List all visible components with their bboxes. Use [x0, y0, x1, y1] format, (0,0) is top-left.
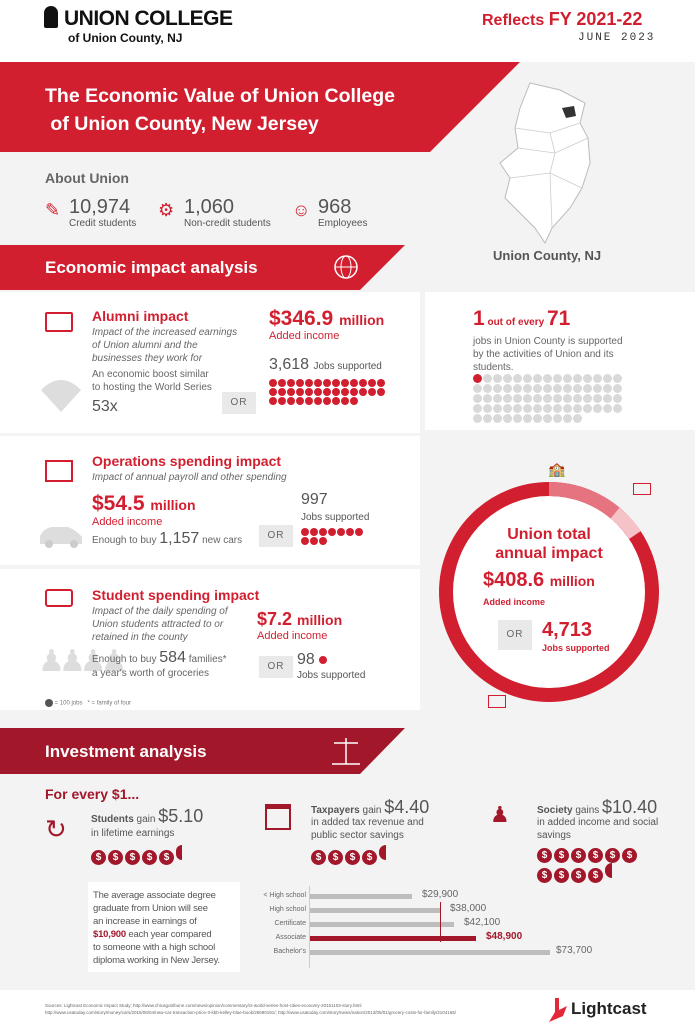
total impact ring: OR: [506, 629, 524, 640]
total impact ring: annual impact: [495, 545, 603, 562]
bar chart: $29,900: [422, 889, 458, 900]
stat credit: [45, 196, 136, 229]
stat noncredit: [158, 196, 271, 229]
students: $: [130, 852, 135, 863]
panel student: OR: [268, 661, 284, 672]
society: $: [593, 850, 598, 861]
panel student: Enough to buy 584 families*: [92, 649, 227, 666]
footer: http://www.usatoday.com/story/money/cars/2015/05/04/new-car-transaction-price-3-kbb-kelley-blue-book/26690191/; http://www.usatoday.com/story/news/nation/2013/05/01/grocery-costs-for-family/2104165/: [45, 1010, 456, 1015]
society: $: [559, 870, 564, 881]
stat credit: Credit students: [69, 218, 136, 229]
panel student: Added income: [257, 630, 327, 642]
panel operations: OR: [268, 530, 284, 541]
panel student: $7.2 million: [257, 609, 342, 629]
total impact ring: Jobs supported: [542, 643, 610, 653]
map: [493, 82, 601, 263]
investment banner: Investment analysis: [45, 742, 207, 761]
stat employees: [292, 196, 368, 229]
econ banner: [0, 245, 405, 290]
panel 1 of 71: [425, 292, 695, 430]
society: $: [542, 850, 547, 861]
associate callout: The average associate degree: [93, 890, 216, 901]
students: $: [113, 852, 118, 863]
panel student: [0, 569, 420, 710]
panel student: ♟♟♟♟: [38, 645, 122, 678]
header: [0, 0, 695, 62]
logo: UNION COLLEGE: [64, 7, 233, 30]
panel student: Jobs supported: [297, 670, 365, 681]
students: [45, 806, 203, 865]
investment content: [0, 774, 695, 990]
title banner: [0, 62, 520, 152]
society: $: [627, 850, 632, 861]
stat noncredit: Non-credit students: [184, 218, 271, 229]
students: $: [164, 852, 169, 863]
bar chart: $42,100: [464, 917, 500, 928]
society: Society gains $10.40: [537, 797, 657, 817]
bar chart: < High school: [263, 892, 306, 899]
society: savings: [537, 830, 571, 841]
society: $: [610, 850, 615, 861]
lightcast logo: Lightcast: [571, 999, 647, 1018]
stat credit: ✎: [45, 200, 60, 220]
panel operations: $54.5 million: [92, 492, 196, 515]
society: $: [576, 870, 581, 881]
map label: Union County, NJ: [493, 248, 601, 263]
society: ♟: [490, 802, 510, 827]
stat employees: 968: [318, 196, 351, 218]
taxpayers: $: [333, 852, 338, 863]
society: [490, 797, 658, 883]
about union: About Union: [45, 170, 129, 186]
stat employees: Employees: [318, 218, 367, 229]
society: $: [576, 850, 581, 861]
associate callout: diploma working in New Jersey.: [93, 955, 220, 966]
panel student: Impact of the daily spending of Union students attracted to or retained in the county: [92, 606, 228, 643]
taxpayers: public sector savings: [311, 830, 404, 841]
students: $: [147, 852, 152, 863]
panel alumni: to hosting the World Series: [92, 382, 212, 393]
students: $: [96, 852, 101, 863]
panel alumni: $346.9 million: [269, 307, 384, 330]
date: Reflects FY 2021-22: [482, 9, 642, 29]
associate callout: $10,900 each year compared: [93, 929, 211, 940]
associate callout: to someone with a high school: [93, 942, 215, 953]
bar chart: $48,900: [486, 931, 522, 942]
panel operations: [0, 436, 420, 565]
students: in lifetime earnings: [91, 828, 174, 839]
lightcast logo: [549, 998, 647, 1022]
panel operations: Added income: [92, 516, 162, 528]
panel alumni: Added income: [269, 330, 339, 342]
logo: of Union County, NJ: [68, 31, 182, 45]
title banner: The Economic Value of Union College: [45, 85, 395, 107]
panel 1 of 71: 1 out of every 71: [473, 307, 570, 330]
taxpayers: $: [350, 852, 355, 863]
panel 1 of 71: jobs in Union County is supported by the activities of Union and its students.: [473, 336, 623, 373]
about union: [45, 170, 368, 229]
bar chart: $38,000: [450, 903, 486, 914]
panel alumni: OR: [230, 397, 248, 408]
associate callout: an increase in earnings of: [93, 916, 197, 927]
stat noncredit: ⚙: [158, 200, 174, 220]
total impact ring: [439, 461, 659, 708]
logo: [44, 6, 233, 45]
total impact ring: $408.6 million: [483, 569, 595, 591]
panel student: = 100 jobs * = family of four: [55, 701, 131, 707]
students: ↻: [45, 814, 67, 844]
panel operations: Enough to buy 1,157 new cars: [92, 530, 242, 547]
stat noncredit: 1,060: [184, 196, 234, 218]
taxpayers: $: [367, 852, 372, 863]
society: in added income and social: [537, 817, 658, 828]
panel alumni: 53x: [92, 398, 118, 415]
panel operations: 997: [301, 491, 328, 508]
taxpayers: in added tax revenue and: [311, 817, 424, 828]
title banner: of Union County, New Jersey: [50, 113, 319, 135]
stat credit: 10,974: [69, 196, 130, 218]
associate callout: graduate from Union will see: [93, 903, 208, 914]
bar chart: [263, 886, 592, 968]
panel student: 98: [297, 651, 315, 668]
bar chart: Associate: [276, 934, 306, 941]
panel student: Student spending impact: [92, 587, 259, 603]
footer: [0, 990, 695, 1024]
total impact ring: Union total: [507, 526, 591, 543]
investment content: For every $1...: [45, 786, 139, 802]
footer: Sources: Lightcast Economic Impact Study; http://www.chicagotribune.com/news/opinion/commentary/ct-world-series-host-cities-economy-20151103-story.html: [45, 1003, 361, 1008]
bar chart: Certificate: [274, 920, 306, 927]
panel alumni: Alumni impact: [92, 308, 188, 324]
taxpayers: Taxpayers gain $4.40: [311, 797, 429, 817]
bar chart: Bachelor's: [274, 948, 306, 955]
society: $: [559, 850, 564, 861]
students: Students gain $5.10: [91, 806, 203, 826]
panel alumni: 3,618 Jobs supported: [269, 356, 382, 373]
panel alumni: An economic boost similar: [92, 369, 209, 380]
associate callout: [88, 882, 240, 972]
bar chart: High school: [269, 906, 306, 913]
society: $: [593, 870, 598, 881]
taxpayers: [265, 797, 429, 865]
total impact ring: 4,713: [542, 619, 592, 641]
taxpayers: $: [316, 852, 321, 863]
society: $: [542, 870, 547, 881]
panel operations: Impact of annual payroll and other spending: [92, 472, 287, 483]
total impact ring: Added income: [483, 597, 545, 607]
total impact ring: 🏫: [548, 461, 565, 477]
econ banner: Economic impact analysis: [45, 258, 258, 277]
stat employees: ☺: [292, 200, 310, 220]
investment banner: [0, 728, 405, 774]
panel alumni: Impact of the increased earnings of Union alumni and the businesses they work for: [92, 327, 237, 364]
panel operations: Jobs supported: [301, 512, 369, 523]
panel operations: Operations spending impact: [92, 453, 281, 469]
panel alumni: [0, 292, 420, 433]
bar chart: $73,700: [556, 945, 592, 956]
header: JUNE 2023: [578, 32, 655, 44]
panel student: a year's worth of groceries: [92, 668, 209, 679]
